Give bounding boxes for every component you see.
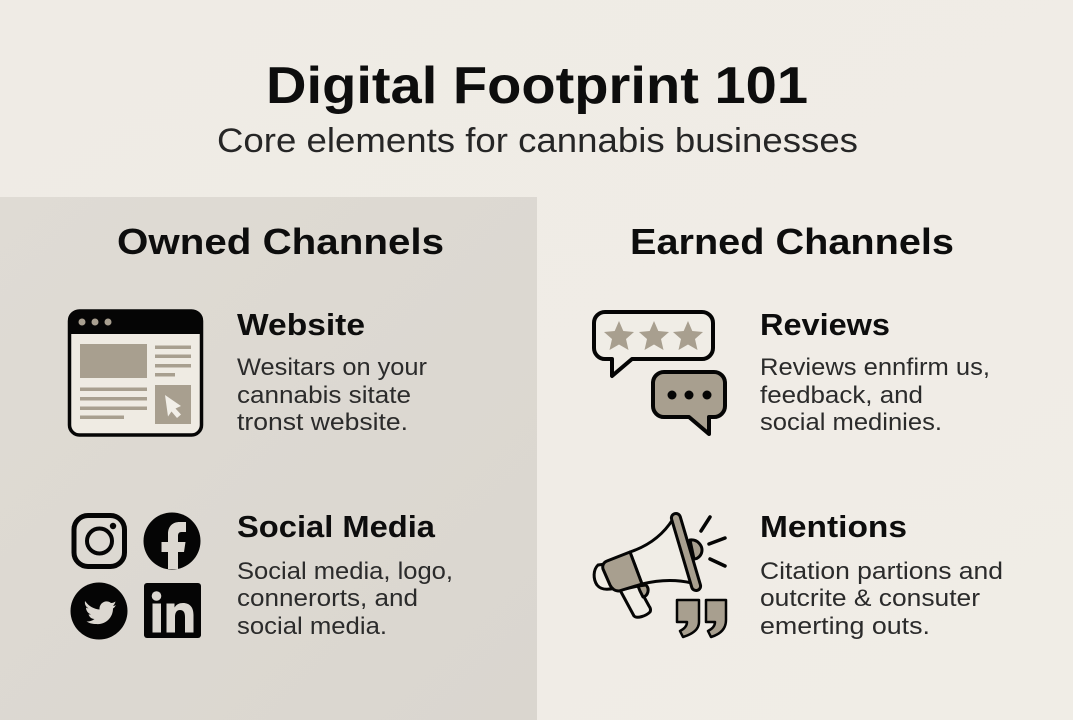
- subtitle: Core elements for cannabis businesses: [217, 122, 858, 160]
- text: mentions: [760, 509, 1003, 640]
- icon: facebook: [144, 512, 200, 570]
- text: reviews: Reviews ennfirm us,: [760, 354, 990, 381]
- title: Digital Footprint 101: [266, 57, 808, 115]
- text: mentions: outcrite & consuter: [760, 585, 980, 612]
- text: mentions: Citation partions and: [760, 558, 1003, 585]
- heading: earned channels: Earned Channels: [630, 221, 954, 262]
- icon: twitter: [70, 582, 128, 640]
- icon: review speech bubbles: [594, 312, 725, 434]
- text: reviews: feedback, and: [760, 382, 923, 409]
- heading: owned channels: Owned Channels: [117, 221, 444, 262]
- text: website: cannabis sitate: [237, 382, 411, 409]
- text: mentions: Mentions: [760, 509, 907, 544]
- panel: owned channels background: [0, 197, 537, 720]
- icon: social media logos: [70, 512, 201, 640]
- text: website: Website: [237, 307, 365, 342]
- text: website: [237, 307, 427, 436]
- text: social media: connerorts, and: [237, 585, 418, 612]
- text: reviews: Reviews: [760, 307, 890, 342]
- icon: instagram: [74, 516, 124, 566]
- text: mentions: emerting outs.: [760, 613, 930, 640]
- icon: website browser window: [68, 310, 203, 435]
- text: social media: [237, 509, 453, 640]
- text: social media: Social media, logo,: [237, 558, 453, 585]
- text: social media: social media.: [237, 613, 387, 640]
- icon: megaphone with quotes: [594, 512, 726, 637]
- text: social media: Social Media: [237, 509, 436, 544]
- icon: linkedin: [144, 583, 201, 638]
- text: website: tronst website.: [237, 409, 408, 436]
- text: website: Wesitars on your: [237, 354, 427, 381]
- text: reviews: [760, 307, 990, 436]
- text: reviews: social medinies.: [760, 409, 942, 436]
